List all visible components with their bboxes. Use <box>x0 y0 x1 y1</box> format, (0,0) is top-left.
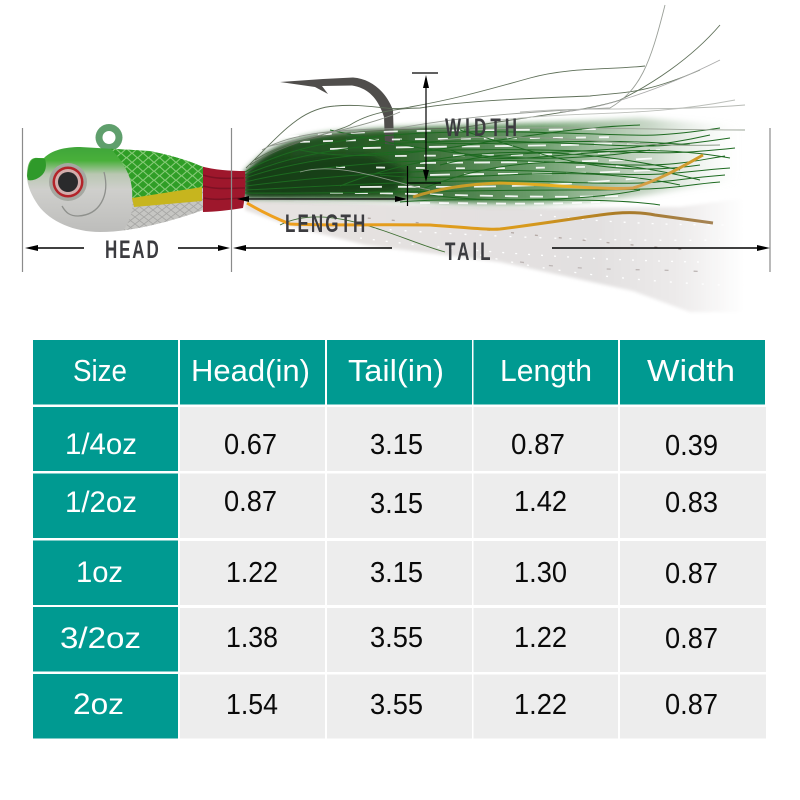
row: 1oz: 1oz <box>76 556 123 589</box>
dimension label: tail: TAIL <box>445 238 491 266</box>
row: 1oz: 3.15 <box>370 557 423 589</box>
tail: white fibres <box>245 198 748 312</box>
header row <box>33 340 765 404</box>
dimension lines <box>22 73 770 272</box>
row: 1oz: 1.30 <box>514 557 567 589</box>
gold flash strips <box>247 155 713 229</box>
row: 1/4oz: 0.39 <box>665 430 718 462</box>
row: 2oz: 1.22 <box>514 689 567 721</box>
boundary lines <box>22 128 770 272</box>
header row: Head(in) <box>191 353 310 388</box>
row: 3/2oz: 1.22 <box>514 622 567 654</box>
dimension label: width: WIDTH <box>445 114 517 142</box>
row: 3/2oz: 3.55 <box>370 622 423 654</box>
head arrows <box>30 247 765 249</box>
row: 2oz: 3.55 <box>370 689 423 721</box>
header row: Length <box>500 353 592 388</box>
lure photo <box>27 5 748 312</box>
row: 1oz: 1.22 <box>226 557 278 589</box>
row: 1/4oz: 1/4oz <box>65 428 137 461</box>
row: 1/4oz: 0.67 <box>224 429 277 461</box>
row: 2oz: 0.87 <box>665 689 718 721</box>
fishing thread wrap <box>200 166 245 212</box>
row: 1/2oz <box>33 474 766 538</box>
green fibre bundle <box>245 5 745 252</box>
dimension label: head: HEAD <box>105 236 159 264</box>
header row: Tail(in) <box>348 353 444 388</box>
row: 1/2oz: 0.87 <box>224 486 277 518</box>
row: 3/2oz <box>33 607 766 672</box>
width arrow <box>412 73 438 178</box>
size table <box>33 340 766 738</box>
row: 1/2oz: 3.15 <box>370 488 423 520</box>
line eye ring <box>96 124 122 151</box>
white gaps between fibres <box>285 129 660 204</box>
length arrow <box>240 166 441 206</box>
row: 1/4oz: 0.87 <box>511 429 565 461</box>
row: 1/4oz <box>33 407 766 471</box>
loose grey-green strands <box>246 5 745 252</box>
green strands <box>245 125 735 205</box>
row: 3/2oz: 1.38 <box>226 622 278 654</box>
row: 2oz: 1.54 <box>226 689 278 721</box>
tail: flash speckles <box>300 215 730 285</box>
row: 1/2oz: 1.42 <box>514 486 567 518</box>
fish eye <box>49 163 87 201</box>
jig head body <box>27 146 210 235</box>
hook <box>280 78 394 145</box>
row: 1oz: 0.87 <box>665 558 718 590</box>
row: 1/2oz: 0.83 <box>665 487 718 519</box>
dimension label: length: LENGTH <box>285 210 365 238</box>
row: 1oz <box>33 540 766 605</box>
row: 2oz <box>33 674 766 738</box>
row: 1/4oz: 3.15 <box>370 429 423 461</box>
header row: Width <box>647 353 735 388</box>
row: 1/2oz: 1/2oz <box>65 486 137 519</box>
header row: Size <box>73 353 127 388</box>
row: 3/2oz: 0.87 <box>665 623 718 655</box>
row: 3/2oz: 3/2oz <box>60 622 141 655</box>
row: 2oz: 2oz <box>73 688 124 721</box>
